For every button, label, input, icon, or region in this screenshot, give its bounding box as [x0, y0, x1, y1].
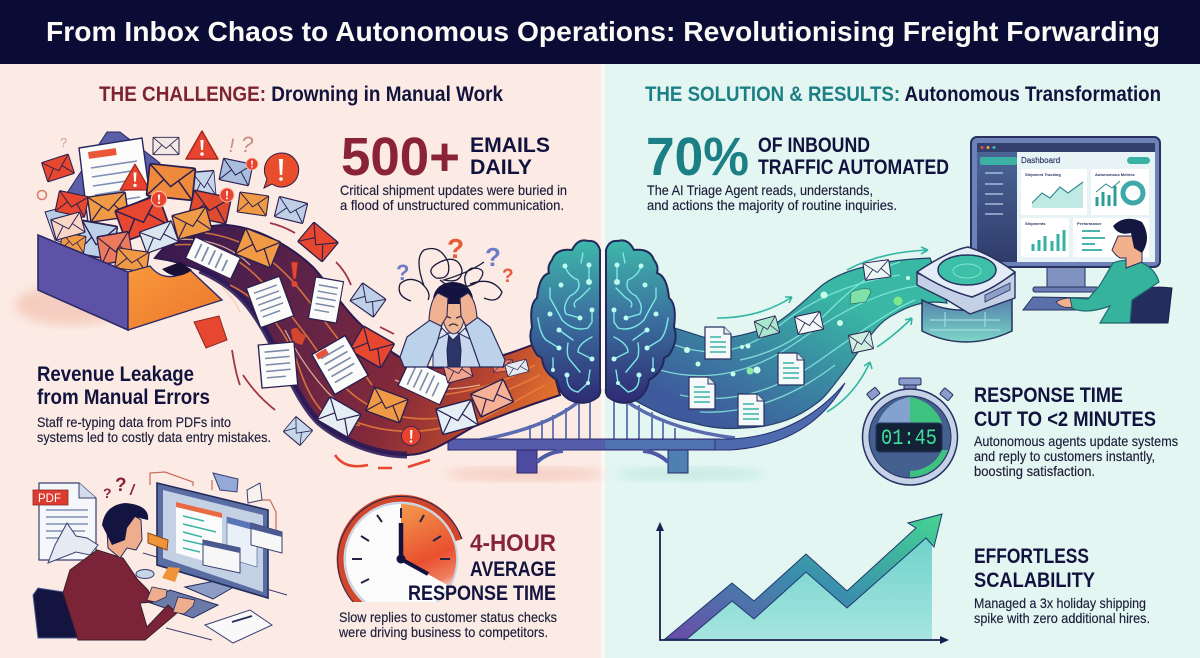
icon: tangled thoughts and question marks: ?: [485, 242, 501, 272]
text block: effortless scalability: [974, 545, 1150, 626]
icon: wall clock: [338, 496, 462, 615]
text block: effortless scalability: Managed a 3x holiday shipping: [974, 595, 1146, 611]
illustration: dashboard monitor: Shipments: [1025, 221, 1046, 226]
icon: tangled thoughts and question marks: ?: [396, 260, 409, 285]
text block: 4-hour average response time: RESPONSE TIME: [408, 582, 556, 605]
text block: 4-hour average response time: 4-HOUR: [470, 530, 556, 557]
stat: 500+ emails daily: [340, 127, 567, 213]
icon: tangled thoughts and question marks: ?: [502, 266, 514, 287]
stat: 500+ emails daily: Critical shipment updates were buried in: [340, 182, 567, 198]
panel: solution background: [605, 64, 1200, 658]
stat: 70% of inbound traffic automated: 70%: [646, 127, 749, 187]
stat: 500+ emails daily: a flood of unstructured communication.: [340, 197, 564, 213]
text block: response time: and reply to customers instantly,: [974, 448, 1155, 464]
illustration: chaotic river of emails: [155, 225, 560, 455]
illustration: flying papers and emails on river: [185, 222, 529, 468]
stat: 500+ emails daily: DAILY: [470, 156, 532, 179]
illustration: automation machine: [917, 247, 1015, 342]
illustration: overloaded worker at computer: ?: [115, 475, 127, 496]
stat: 70% of inbound traffic automated: OF INBOUND: [758, 134, 870, 157]
pile of emails and alerts: !: [229, 136, 235, 157]
text block: revenue leakage: systems led to costly data entry mistakes.: [37, 429, 271, 445]
stat: 500+ emails daily: EMAILS: [470, 134, 550, 157]
stat: 70% of inbound traffic automated: [646, 127, 949, 213]
illustration: overflowing inbox tray: [15, 131, 308, 330]
text block: response time: Autonomous agents update systems: [974, 433, 1178, 449]
illustration: dashboard monitor: Autonomous Metrics: [1095, 172, 1136, 177]
stat: 70% of inbound traffic automated: TRAFFIC AUTOMATED: [758, 156, 949, 179]
icon: tangled thoughts and question marks: ?: [447, 233, 464, 264]
illustration: keyboard: [1023, 297, 1097, 310]
dashboard heading: Dashboard: [1021, 156, 1060, 165]
pile of emails and alerts: ?: [60, 135, 67, 150]
heading: the challenge: THE CHALLENGE: Drowning in Manual Work: [99, 83, 503, 106]
text block: revenue leakage: [37, 363, 271, 445]
text block: effortless scalability: spike with zero additional hires.: [974, 610, 1150, 626]
stat: 500+ emails daily: 500+: [341, 127, 460, 187]
icon: stopwatch: 01:45: [881, 426, 937, 451]
text block: 4-hour average response time: Slow replies to customer status checks: [339, 609, 557, 625]
illustration: AI brain: [530, 240, 676, 403]
bridge: [445, 383, 845, 481]
illustration: overloaded worker at computer: ?: [103, 485, 112, 501]
title bar: From Inbox Chaos to Autonomous Operations: Revolutionising Freight Forwarding: [46, 16, 1160, 47]
title bar: [0, 0, 1200, 64]
text block: effortless scalability: EFFORTLESS: [974, 545, 1089, 568]
text block: revenue leakage: Staff re-typing data from PDFs into: [37, 414, 231, 430]
text block: response time: boosting satisfaction.: [974, 463, 1095, 479]
icon: PDF document: [33, 483, 96, 560]
icon: emails and documents in the stream: [689, 260, 891, 426]
text block: 4-hour average response time: were driving business to competitors.: [338, 624, 548, 640]
illustration: overloaded worker at computer: [33, 472, 287, 643]
text block: effortless scalability: SCALABILITY: [974, 569, 1095, 592]
pile of emails and alerts: [38, 131, 308, 272]
icon: stopwatch: [862, 378, 958, 485]
text block: revenue leakage: from Manual Errors: [37, 386, 210, 409]
arrows: data flow: [717, 247, 928, 412]
stat: 70% of inbound traffic automated: The AI Triage Agent reads, understands,: [647, 182, 873, 198]
icon: PDF document: PDF: [38, 493, 61, 505]
text block: response time: [974, 384, 1178, 479]
text block: response time: RESPONSE TIME: [974, 384, 1123, 407]
heading: the solution and results: THE SOLUTION & RESULTS: Autonomous Transformation: [645, 83, 1161, 106]
illustration: happy operator: [1056, 219, 1172, 323]
illustration: stressed worker: [400, 282, 505, 367]
illustration: dashboard monitor: [971, 137, 1160, 292]
pile of emails and alerts: ?: [241, 132, 254, 157]
illustration: overloaded worker at computer: /: [129, 482, 136, 499]
illustration: dashboard monitor: Shipment Tracking: [1025, 172, 1061, 177]
text block: revenue leakage: Revenue Leakage: [37, 363, 194, 386]
illustration: dashboard monitor: Performance: [1077, 221, 1102, 226]
text block: 4-hour average response time: [338, 530, 557, 640]
text block: 4-hour average response time: AVERAGE: [470, 558, 556, 581]
illustration: glowing data stream: [625, 247, 947, 428]
text block: response time: CUT TO <2 MINUTES: [974, 408, 1156, 431]
stat: 70% of inbound traffic automated: and actions the majority of routine inquiries.: [647, 197, 897, 213]
panel: challenge background: [0, 64, 601, 658]
icon: tangled thoughts and question marks: [396, 233, 514, 301]
chart: growth line: [656, 514, 949, 644]
